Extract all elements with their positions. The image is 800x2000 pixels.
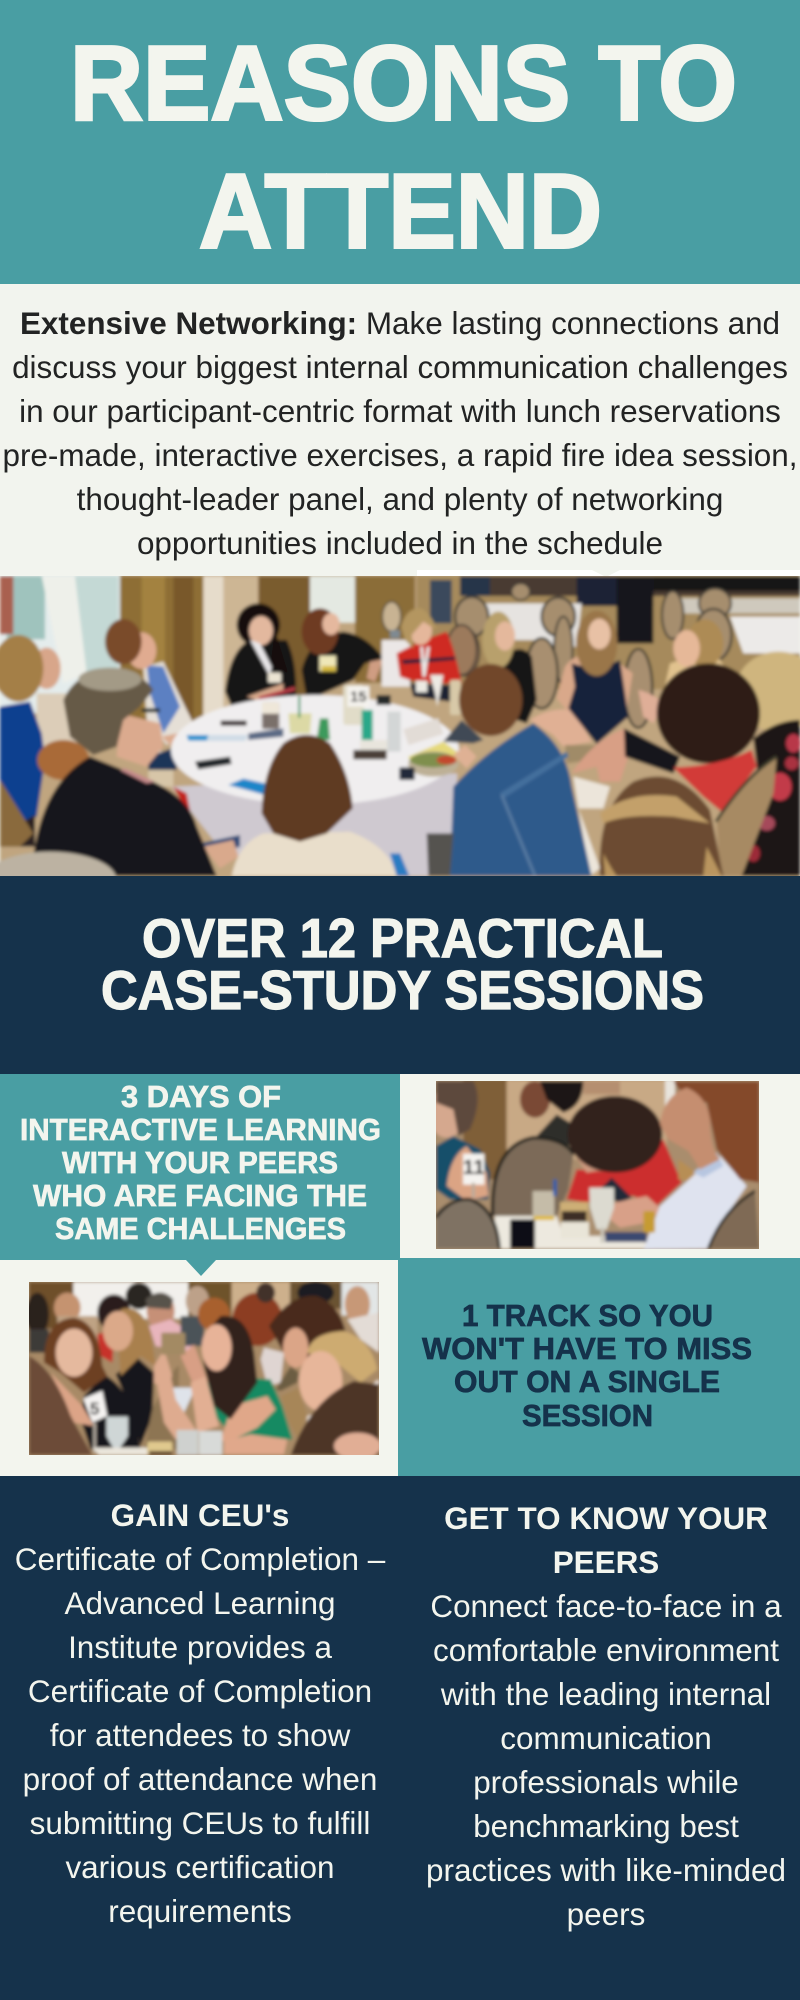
text block: get to know your peers: Connect face-to-face in a [430,1589,782,1624]
photo: round table discussion [0,576,800,876]
woman black top blond [500,649,537,723]
chair by window [382,602,401,632]
callout text: SESSION [522,1398,653,1433]
callout text [20,1079,381,1246]
panel: bottom columns [0,1476,800,2000]
main table [172,773,457,876]
curly hair speaker-side [657,663,760,763]
callout text [422,1298,752,1433]
panel: title banner [0,0,800,284]
text block: get to know your peers: communication [500,1721,712,1756]
far chairs by table [461,632,482,678]
curly-haired woman [140,659,194,755]
callout text: WITH YOUR PEERS [62,1145,338,1180]
callout text: WON'T HAVE TO MISS [422,1331,752,1366]
text block: networking description [2,306,798,561]
text block: get to know your peers: with the leading internal [440,1677,771,1712]
panel: 1 track [398,1258,800,1476]
text block: networking description: opportunities included in the schedule [137,526,663,561]
table number & glasses [83,1391,107,1423]
photo: round table discussion: 15 [350,690,366,706]
text block: get to know your peers: professionals while [473,1765,739,1800]
hands [224,1434,287,1454]
text block: networking description: thought-leader panel, and plenty of networking [77,482,723,517]
arm and phone [157,1376,196,1439]
callout text: 3 DAYS OF [121,1079,281,1114]
text block: gain CEUs [15,1498,386,1929]
callout text: SAME CHALLENGES [55,1211,346,1246]
photo: woman writing at table: 11 [463,1156,485,1179]
text block: gain CEUs: submitting CEUs to fulfill [30,1806,370,1841]
white hair foreground [0,852,117,908]
callout text: WHO ARE FACING THE [33,1178,367,1213]
floral [740,720,800,876]
callout text: INTERACTIVE LEARNING [20,1112,381,1147]
callout text: 1 TRACK SO YOU [462,1298,713,1333]
text block: get to know your peers: comfortable environment [433,1633,779,1668]
callout text: OUT ON A SINGLE [454,1364,720,1399]
orange hair behind [37,740,89,780]
left woman [81,1374,141,1449]
foreground left hair [29,1356,92,1455]
white table [172,1388,196,1413]
red blouse [673,750,757,812]
title: REASONS TO [70,24,737,142]
table number [463,1154,484,1185]
blue woman [0,702,45,835]
text block: get to know your peers: practices with like-minded [426,1853,786,1888]
text block: gain CEUs: Institute provides a [68,1630,332,1665]
heading [101,907,704,1021]
chair [144,1366,179,1449]
chair right [708,1189,759,1249]
blonde woman right [735,652,800,732]
white pants [573,777,610,876]
heading: OVER 12 PRACTICAL [142,907,663,969]
text block: networking description: pre-made, interactive exercises, a rapid fire idea session, [2,438,798,473]
chair mid [493,1138,573,1216]
blond back-of-head [600,776,723,876]
red shirt [567,1139,682,1206]
panel: 3 days of interactive learning [0,1074,400,1260]
text block: get to know your peers [426,1501,786,1932]
title: ATTEND [199,152,602,270]
red shirt woman [447,625,477,675]
text block: gain CEUs: GAIN CEU's [111,1498,289,1533]
left woman [436,1136,490,1199]
panel: photo cream right [436,1081,759,1249]
woman ponytail [97,1329,114,1363]
items on table [221,721,247,726]
green woman [192,1376,292,1443]
text block: get to know your peers: benchmarking best [473,1809,739,1844]
icon: pointer triangle [186,1260,216,1276]
navy dress woman [530,709,592,747]
text block: gain CEUs: requirements [108,1894,292,1929]
text block: networking description: discuss your biggest internal communication challenges [12,350,788,385]
text block: gain CEUs: various certification [65,1850,335,1885]
foreground right hair [291,1381,379,1455]
title [70,24,737,270]
right woman brunette [269,1296,346,1366]
back woman [537,1114,570,1146]
denim jacket woman [450,723,592,876]
chair right [717,757,777,876]
second black top woman [302,632,383,695]
speaking woman [664,658,724,686]
text block: get to know your peers: PEERS [553,1545,659,1580]
text block: gain CEUs: Certificate of Completion – [15,1542,386,1577]
photo: attendees with phone [24,1276,384,1460]
text block: gain CEUs: Certificate of Completion [28,1674,372,1709]
text block: gain CEUs: for attendees to show [50,1718,351,1753]
text block: gain CEUs: proof of attendance when [23,1762,377,1797]
text block: get to know your peers: GET TO KNOW YOUR [444,1501,768,1536]
text block: networking description: in our participant-centric format with lunch reservations [19,394,781,429]
back room [417,576,800,689]
chair left front [436,1199,499,1249]
photo: woman writing at table [428,1076,767,1253]
panel: extensive networking [0,285,800,577]
heading: CASE-STUDY SESSIONS [101,959,704,1021]
right woman [643,1156,747,1249]
back crowd [26,1293,49,1336]
man [32,757,217,876]
chair bottom left [0,780,33,847]
blonde woman [307,1331,377,1383]
table [495,1216,647,1249]
legs and skirt [572,728,628,782]
back hair right [678,1159,697,1181]
photo: attendees with phone: 5 [90,1398,100,1418]
text block: get to know your peers: peers [567,1897,645,1932]
text block: networking description: Extensive Networking: Make lasting connections and [20,306,780,341]
panel: photo cream left with pointer [0,1260,398,1476]
brunette in cream jacket [232,832,397,876]
panel: practical sessions heading [0,876,800,1074]
text block: gain CEUs: Advanced Learning [65,1586,335,1621]
black top woman [225,640,296,711]
